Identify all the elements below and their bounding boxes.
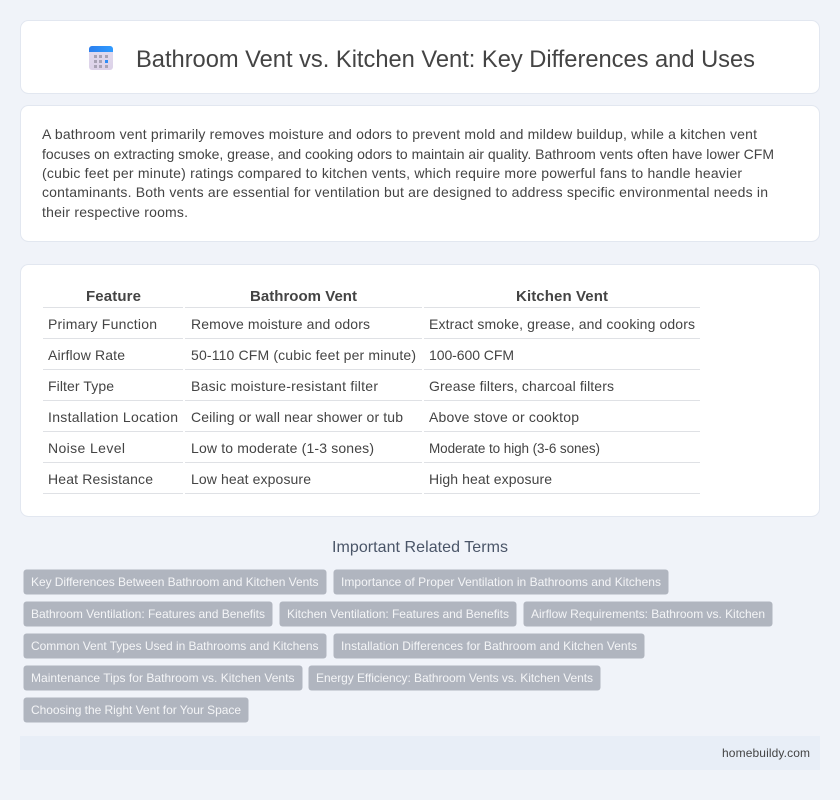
table header row: Bathroom Vent: [250, 288, 357, 305]
table body rows: Remove moisture and odors: [191, 316, 370, 332]
tag: Energy Efficiency: Bathroom Vents vs. Kitchen Vents: [316, 671, 593, 685]
table body rows: Filter Type: [48, 378, 114, 394]
tag: [24, 570, 326, 594]
tag: Airflow Requirements: Bathroom vs. Kitchen: [531, 607, 765, 621]
related terms heading: Important Related Terms: [332, 539, 508, 556]
tag: [308, 666, 600, 690]
intro text panel: focuses on extracting smoke, grease, and cooking odors to maintain air quality. Bathroom vents often have lower CFM: [42, 146, 774, 162]
table body rows: Grease filters, charcoal filters: [429, 378, 614, 394]
table body rows: Above stove or cooktop: [429, 409, 579, 425]
tag: [24, 666, 302, 690]
table body rows: 100-600 CFM: [429, 347, 514, 363]
header panel: [20, 20, 820, 94]
table body rows: Ceiling or wall near shower or tub: [191, 409, 403, 425]
tag: Importance of Proper Ventilation in Bathrooms and Kitchens: [341, 575, 661, 589]
intro text panel: contaminants. Both vents are essential for ventilation but are designed to address specific environmental needs in: [42, 184, 768, 200]
table body rows: Moderate to high (3-6 sones): [429, 441, 600, 456]
comparison table panel: [20, 264, 820, 516]
table body rows: Noise Level: [48, 440, 125, 456]
tag: Key Differences Between Bathroom and Kitchen Vents: [31, 575, 318, 589]
tag: [24, 602, 272, 626]
table body rows: Primary Function: [48, 316, 157, 332]
title: Bathroom Vent vs. Kitchen Vent: Key Differences and Uses: [136, 47, 755, 73]
table body rows: High heat exposure: [429, 471, 552, 487]
table body rows: Installation Location: [48, 409, 178, 425]
table header row: [86, 288, 608, 305]
table body rows: Extract smoke, grease, and cooking odors: [429, 316, 695, 332]
tag: [524, 602, 772, 626]
intro text panel: A bathroom vent primarily removes moisture and odors to prevent mold and mildew buildup, while a kitchen vent: [42, 126, 757, 142]
tag: [334, 634, 644, 658]
table body rows: Airflow Rate: [48, 347, 125, 363]
table body rows: Basic moisture-resistant filter: [191, 378, 378, 394]
tag: [334, 570, 668, 594]
table body rows: Low to moderate (1-3 sones): [191, 440, 374, 456]
intro text panel: (cubic feet per minute) ratings compared to kitchen vents, which require more powerful fans to handle heavier: [42, 165, 742, 181]
footer bar: [20, 736, 820, 770]
tag: Common Vent Types Used in Bathrooms and Kitchens: [31, 639, 318, 653]
footer source text: homebuildy.com: [722, 746, 810, 760]
table body rows: Low heat exposure: [191, 471, 311, 487]
tag: [280, 602, 516, 626]
intro text panel: their respective rooms.: [42, 204, 188, 220]
table body rows: Heat Resistance: [48, 471, 153, 487]
tag: [24, 698, 248, 722]
icon: calendar grid: [89, 46, 113, 70]
tag: Choosing the Right Vent for Your Space: [31, 703, 241, 717]
tag: Bathroom Ventilation: Features and Benefits: [31, 607, 265, 621]
table body rows: 50-110 CFM (cubic feet per minute): [191, 347, 416, 363]
tag: [24, 634, 326, 658]
table header row: Kitchen Vent: [516, 288, 608, 305]
related terms tags: [24, 570, 772, 722]
tag: Installation Differences for Bathroom and Kitchen Vents: [341, 639, 637, 653]
tag: Maintenance Tips for Bathroom vs. Kitchen Vents: [31, 671, 294, 685]
tag: Kitchen Ventilation: Features and Benefits: [287, 607, 509, 621]
table body rows: [48, 316, 695, 487]
table header row: Feature: [86, 288, 141, 305]
intro text panel: [20, 106, 820, 242]
